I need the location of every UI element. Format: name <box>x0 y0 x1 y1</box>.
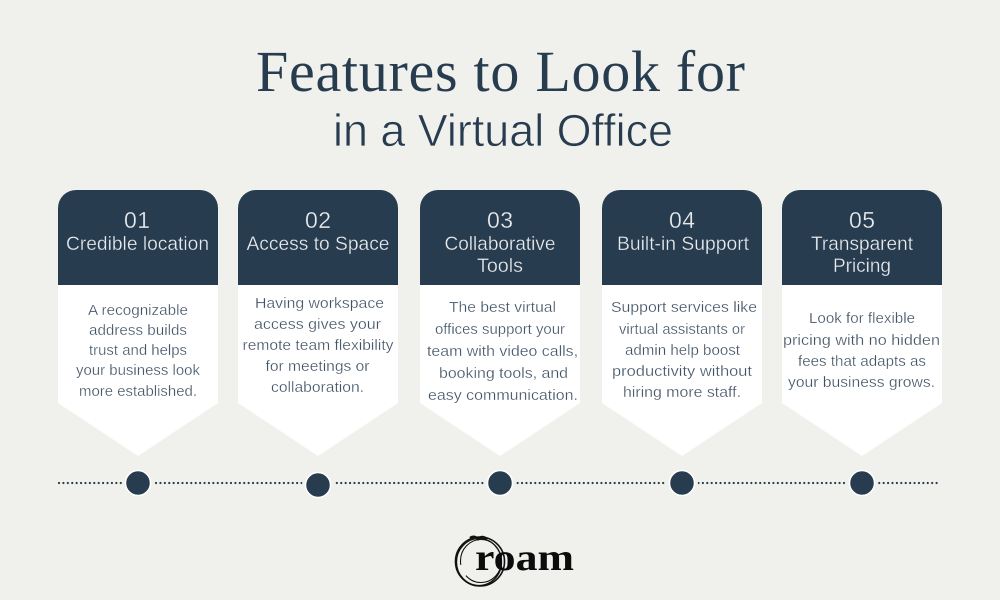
panel: 02 access to space: collaboration. <box>271 379 364 396</box>
panel: 05 transparent pricing <box>782 190 942 456</box>
panel: 04 built-in support: virtual assistants or <box>619 321 745 338</box>
panel: 04 built-in support: Built-in Support <box>617 233 750 255</box>
panel: 03 collaborative tools: Collaborative <box>444 233 556 255</box>
panel: 04 built-in support: Support services like <box>611 299 757 316</box>
panel: 01 credible location: Credible location <box>66 233 209 255</box>
panel: 05 transparent pricing: your business grows. <box>788 374 935 391</box>
panel: 05 transparent pricing: 05 <box>849 207 875 233</box>
panel: 02 access to space <box>238 190 398 456</box>
panel: 05 transparent pricing: Transparent <box>811 233 914 255</box>
panel: 02 access to space: 02 <box>305 207 331 233</box>
panel: 04 built-in support: 04 <box>669 207 695 233</box>
panel: 01 credible location: 01 <box>124 207 150 233</box>
timeline <box>59 467 938 501</box>
panel: 03 collaborative tools <box>420 190 580 456</box>
panel: 02 access to space: Access to Space <box>246 233 390 255</box>
panel: 03 collaborative tools: 03 <box>487 207 513 233</box>
panel: 02 access to space: access gives your <box>254 316 381 333</box>
panel: 05 transparent pricing: pricing with no hidden <box>783 332 940 349</box>
panel: 03 collaborative tools: team with video calls, <box>427 343 578 360</box>
panel: 03 collaborative tools: offices support your <box>435 321 565 338</box>
panel: 04 built-in support: hiring more staff. <box>623 384 741 401</box>
panel: 03 collaborative tools: booking tools, and <box>439 365 568 382</box>
panel: 01 credible location: your business look <box>76 362 200 379</box>
title: in a Virtual Office <box>333 105 673 156</box>
panel: 01 credible location <box>58 190 218 456</box>
panel: 01 credible location: trust and helps <box>89 342 187 359</box>
panel: 05 transparent pricing: Pricing <box>833 255 891 277</box>
panel: 03 collaborative tools: Tools <box>477 255 523 277</box>
panel: 03 collaborative tools: easy communication. <box>428 387 578 404</box>
panel: 05 transparent pricing: fees that adapts as <box>798 353 926 370</box>
panel: 02 access to space: Having workspace <box>255 295 384 312</box>
panel: 01 credible location: more established. <box>79 383 197 400</box>
title <box>256 39 745 156</box>
panel: 04 built-in support: admin help boost <box>625 342 741 359</box>
panel: 02 access to space: remote team flexibility <box>242 337 394 354</box>
panel: 04 built-in support: productivity without <box>612 363 753 380</box>
panel: 01 credible location: A recognizable <box>88 302 188 319</box>
logo: roam: roam <box>475 537 574 579</box>
title: Features to Look for <box>256 39 745 104</box>
panel: 01 credible location: address builds <box>89 322 187 339</box>
panel: 04 built-in support <box>602 190 762 456</box>
panel: 05 transparent pricing: Look for flexible <box>809 310 915 327</box>
panel: 02 access to space: for meetings or <box>266 358 370 375</box>
logo: roam <box>456 537 574 586</box>
panel: 03 collaborative tools: The best virtual <box>449 299 556 316</box>
